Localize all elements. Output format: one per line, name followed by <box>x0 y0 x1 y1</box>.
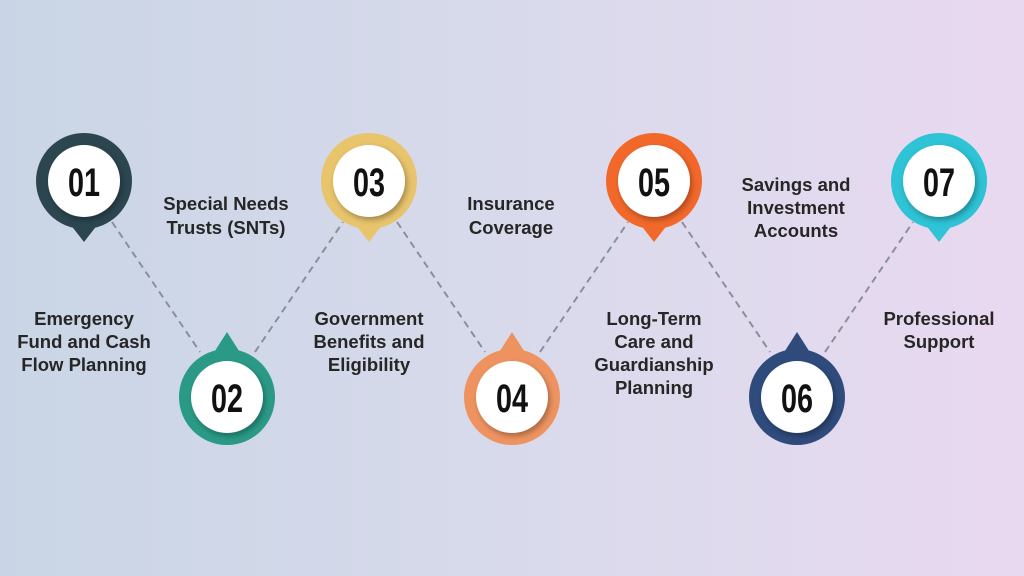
marker 01 <box>36 133 132 242</box>
marker 06 <box>749 332 845 445</box>
marker 07: 07 <box>923 160 955 205</box>
marker 04: 04 <box>496 376 529 421</box>
text: emergency fund: Emergency <box>34 308 135 329</box>
text: savings and investment: Accounts <box>754 220 838 241</box>
marker 03: 03 <box>353 160 385 205</box>
text: long-term care: Long-Term <box>606 308 702 329</box>
text: savings and investment: Savings and <box>742 174 850 195</box>
text: long-term care: Guardianship <box>594 354 714 375</box>
text: insurance coverage: Coverage <box>469 217 553 238</box>
text: long-term care: Planning <box>615 377 693 398</box>
marker 06: 06 <box>781 376 813 421</box>
marker 05: 05 <box>638 160 670 205</box>
text: long-term care: Care and <box>614 331 694 352</box>
text: government benefits: Government <box>315 308 423 329</box>
marker 04 <box>464 332 560 445</box>
text: emergency fund: Fund and Cash <box>17 331 151 352</box>
marker 03 <box>321 133 417 242</box>
text: special needs trusts: Trusts (SNTs) <box>167 217 285 238</box>
text: emergency fund: Flow Planning <box>21 354 147 375</box>
marker 07 <box>891 133 987 242</box>
text: professional support: Professional <box>883 308 995 329</box>
text: insurance coverage: Insurance <box>467 193 555 214</box>
marker 05 <box>606 133 702 242</box>
text: special needs trusts: Special Needs <box>163 193 289 214</box>
marker 02: 02 <box>211 376 243 421</box>
text: government benefits: Eligibility <box>328 354 411 375</box>
text: professional support: Support <box>904 331 974 352</box>
text: government benefits: Benefits and <box>313 331 425 352</box>
marker 01: 01 <box>68 160 100 205</box>
text: savings and investment: Investment <box>747 197 845 218</box>
marker 02 <box>179 332 275 445</box>
